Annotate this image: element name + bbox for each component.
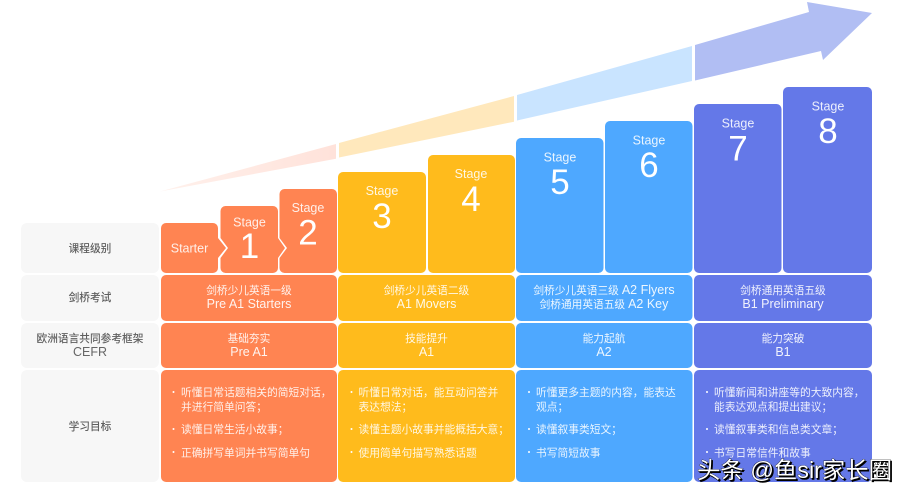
CEFR: B1: 能力突破 (762, 332, 805, 345)
row labels column (21, 223, 159, 482)
watermark: 头条 @鱼sir家长圈 (697, 457, 892, 483)
CEFR: B1: B1 (775, 345, 791, 359)
CEFR: Pre A1: Pre A1 (230, 345, 268, 359)
CEFR: A1: A1 (419, 345, 434, 359)
stage block: Stage 6 (605, 121, 692, 273)
CEFR row (161, 323, 872, 368)
arrow segment: blue (517, 46, 692, 120)
stage block: Stage 4: 4 (461, 180, 481, 219)
stage block: Stage 1 (220, 206, 285, 273)
CEFR: A1 (338, 323, 515, 368)
goals: orange: 正确拼写单词并书写简单句 (181, 446, 310, 460)
goals: purple: 书写日常信件和故事 (714, 446, 811, 460)
stage block: Stage 5: 5 (550, 163, 570, 202)
goals: orange: 读懂日常生活小故事； (181, 423, 289, 436)
stage block: Stage 6: 6 (639, 146, 659, 185)
exam: Starters (161, 275, 337, 321)
goals: blue: 书写简短故事 (536, 446, 601, 460)
exam: Preliminary (694, 275, 872, 321)
exam row (161, 275, 872, 321)
label: CEFR: CEFR (73, 345, 107, 359)
goals: blue (516, 370, 692, 482)
label: course level: 课程级别 (69, 242, 111, 255)
stage block: Stage 7: Stage (722, 116, 754, 130)
stage block: Stage 3: Stage (366, 184, 398, 198)
exam: Preliminary: 剑桥通用英语五级 (740, 284, 826, 297)
goals: purple: 听懂新闻和讲座等的大致内容， (714, 386, 865, 399)
goals: purple (694, 370, 872, 482)
stage block: Stage 3: 3 (372, 197, 392, 236)
CEFR: A1: 技能提升 (405, 332, 448, 345)
goals: blue: 读懂叙事类短文； (536, 423, 622, 436)
stage block: Stage 8 (783, 87, 872, 273)
stage block: Stage 8: Stage (812, 100, 844, 114)
stage block: Stage 6: Stage (633, 134, 665, 148)
exam: Preliminary: B1 Preliminary (742, 297, 824, 311)
goals: purple: 能表达观点和提出建议； (714, 400, 832, 414)
stage block: Stage 7: 7 (728, 130, 748, 168)
arrow segment: yellow (339, 96, 514, 158)
arrow segment: purple arrowhead (695, 2, 872, 80)
stage block: Stage 5 (516, 138, 604, 273)
goals: orange (161, 370, 337, 482)
exam: Flyers and Key (516, 275, 692, 321)
stage block: Stage 5: Stage (544, 150, 576, 164)
stage blocks: orange (161, 189, 337, 273)
CEFR: Pre A1: 基础夯实 (228, 332, 270, 345)
growth arrow (160, 2, 872, 192)
goals: yellow: 听懂日常对话，能互动问答并 (358, 386, 499, 399)
stage block: Stage 3 (338, 172, 426, 273)
arrow segment: orange (160, 144, 336, 192)
stage block: Stage 7 (694, 104, 782, 273)
stage block: Stage 8: 8 (818, 112, 838, 151)
CEFR: A2: A2 (596, 345, 612, 359)
CEFR: B1 (694, 323, 872, 368)
stage blocks: blue (516, 121, 692, 273)
stage blocks: yellow (338, 155, 515, 273)
stage block: Stage 1: 1 (240, 227, 259, 266)
label: course level (21, 223, 159, 273)
label: Cambridge exam: 剑桥考试 (69, 291, 112, 304)
exam: Movers: 剑桥少儿英语二级 (384, 284, 470, 297)
exam: Movers (338, 275, 515, 321)
goals: yellow: 表达想法； (358, 400, 412, 414)
CEFR: A2 (516, 323, 692, 368)
stage block: Starter: Starter (171, 242, 208, 256)
CEFR: Pre A1 (161, 323, 337, 368)
goals: purple: 读懂叙事类和信息类文章； (714, 423, 843, 436)
stage block: Stage 1: Stage (233, 216, 266, 230)
stage block: Stage 4 (428, 155, 515, 273)
goals: orange: 并进行简单问答； (181, 400, 267, 414)
stage block: Stage 2 (280, 189, 337, 273)
stage block: Stage 2: 2 (298, 214, 318, 252)
goals: yellow: 使用简单句描写熟悉话题 (358, 446, 477, 460)
label: learning goals (21, 370, 159, 482)
goals: orange: 听懂日常话题相关的简短对话， (181, 386, 332, 399)
goals: yellow: 读懂主题小故事并能概括大意； (358, 423, 509, 436)
label: CEFR: 欧洲语言共同参考框架 (37, 332, 144, 345)
exam: Flyers and Key: 剑桥通用英语五级 A2 Key (540, 297, 669, 311)
goals: blue: 听懂更多主题的内容，能表达 (536, 386, 676, 399)
exam: Starters: Pre A1 Starters (207, 297, 291, 311)
goals: blue: 观点； (536, 402, 568, 414)
stage block: Starter (161, 223, 226, 273)
learning goals row (161, 370, 872, 482)
goals: yellow (338, 370, 515, 482)
exam: Flyers and Key: 剑桥少儿英语三级 A2 Flyers (533, 283, 675, 297)
label: Cambridge exam (21, 275, 159, 321)
label: CEFR (21, 323, 159, 368)
stage block: Stage 2: Stage (292, 201, 324, 215)
exam: Movers: A1 Movers (397, 297, 456, 311)
stage block: Stage 4: Stage (455, 167, 487, 181)
CEFR: A2: 能力起航 (583, 332, 626, 345)
exam: Starters: 剑桥少儿英语一级 (206, 284, 292, 297)
label: learning goals: 学习目标 (69, 420, 112, 433)
stage blocks: purple (694, 87, 872, 273)
